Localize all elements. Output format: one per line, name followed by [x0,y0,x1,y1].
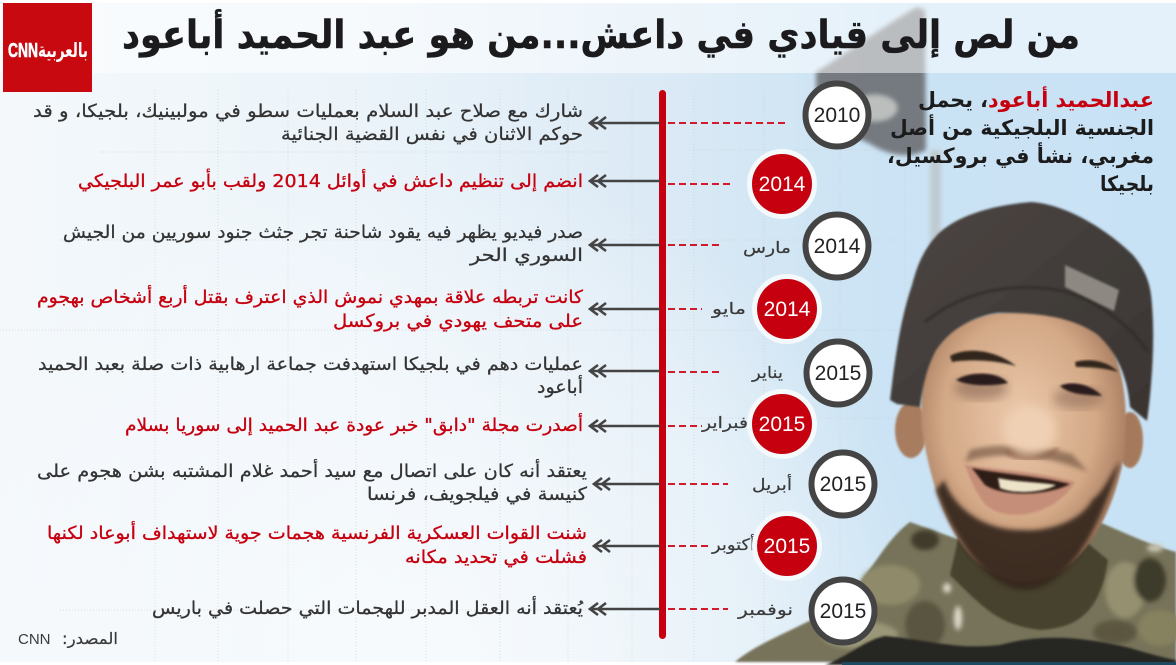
year badge [812,580,874,642]
year badge: 2015 [764,535,810,558]
red dashes [668,183,730,185]
event text: السوري الحر [469,245,583,266]
event text: على متحف يهودي في بروكسل [333,311,583,332]
year badge: 2015 [815,362,861,385]
year badge: 2014 [764,298,811,321]
year badge [754,514,820,578]
year badge [750,152,814,216]
event text: أباعود [537,375,583,398]
red dashes [668,244,723,246]
title: من لص إلى قيادي في داعش...من هو عبد الحميد أباعود [122,9,1080,58]
arrow [590,365,660,377]
event text: يُعتقد أنه العقل المدبر للهجمات التي حصلت في باريس [152,596,584,619]
nose highlight [1004,406,1056,454]
bottom bar [842,662,1176,665]
year badge [812,452,874,516]
event text [37,459,587,505]
event text: كنيسة في فيلجويف، فرنسا [367,484,587,505]
hat label [1065,265,1119,311]
intro text block: بلجيكا [1100,172,1154,196]
face [921,311,1126,582]
source note: CNN [18,631,50,648]
month: مارس [743,238,791,258]
flag in background [816,7,941,265]
row 4: May 2014 [37,276,820,342]
source note: المصدر: [62,629,118,649]
row 3: March 2014 [63,214,868,278]
mouth [965,465,1075,515]
event text [33,101,583,145]
event text [47,521,587,568]
intro text block: عبدالحميد أباعود، يحمل [918,85,1154,112]
logo: CNN Arabic: بالعربية [38,38,88,62]
month: مايو [711,299,746,319]
timeline vertical bar [659,90,666,639]
month: أبريل [752,474,792,495]
row 9: November 2015 [152,580,874,642]
arrow [590,117,660,129]
source note [18,629,118,649]
event text [37,285,583,332]
header band [0,3,1176,73]
intro text block [887,85,1154,196]
month: فبراير [701,413,748,433]
red dashes [668,483,728,485]
intro text block: مغربي، نشأ في بروكسيل، [887,141,1154,168]
event text [38,354,583,398]
event text: أصدرت مجلة "دابق" خبر عودة عبد الحميد إلى سوريا بسلام [125,413,583,436]
event text: صدر فيديو يظهر فيه يقود شاحنة تجر جثث جنود سوريين من الجيش [63,222,583,243]
event text: عمليات دهم في بلجيكا استهدفت جماعة ارهابية ذات صلة بعبد الحميد [38,354,583,375]
red dashes [668,545,708,547]
year badge: 2014 [814,235,861,258]
arrow [590,420,660,432]
year badge [806,342,870,404]
eyes [956,374,1008,385]
logo: CNN Arabic [3,3,92,92]
red dashes [668,425,702,427]
arrow [590,603,660,615]
arrow [594,478,660,490]
logo: CNN Arabic: CNN [8,40,38,62]
row 2: 2014 [78,152,814,216]
year badge: 2015 [820,473,866,496]
year badge: 2015 [820,600,866,623]
red dashes [668,608,728,610]
row 7: April 2015 [37,452,874,516]
eyebrows [950,351,1016,366]
arrow [594,540,660,552]
event text: شارك مع صلاح عبد السلام بعمليات سطو في مولبينيك، بلجيكا، و قد [33,101,583,122]
row 5: January 2015 [38,342,870,404]
jacket [735,522,1176,662]
hat [890,202,1153,421]
beard [936,462,1120,590]
month: نوفمبر [737,600,793,620]
year badge: 2010 [814,104,860,127]
event text: كانت تربطه علاقة بمهدي نموش الذي اعترف بقتل أربع أشخاص بهجوم [37,285,583,308]
year badge [754,276,820,342]
year badge: 2015 [759,413,805,436]
red dashes [668,371,722,373]
row 6: February 2015 [125,392,814,456]
arrow [590,303,660,315]
event text: انضم إلى تنظيم داعش في أوائل 2014 ولقب بأبو عمر البلجيكي [78,168,583,192]
nose shadow [1005,448,1058,459]
intro text block: الجنسية البلجيكية من أصل [890,113,1154,140]
t-shirt [950,520,1108,630]
arrow [590,175,660,187]
camouflage patches [822,530,1176,649]
year badge: 2014 [759,173,806,196]
ears [895,402,927,458]
year badge [806,84,868,146]
red dashes [668,122,788,124]
event text: يعتقد أنه كان على اتصال مع سيد أحمد غلام المشتبه بشن هجوم على [37,459,587,482]
month: أكتوبر [711,534,755,555]
year badge [750,392,814,456]
arrow [590,239,660,251]
event text [63,222,583,266]
hat fold [925,288,1148,352]
month: يناير [751,363,783,383]
red dashes [668,308,702,310]
year badge [806,214,868,278]
portrait photo [735,202,1176,665]
row 8: October 2015 [47,514,820,578]
zipper and collar [825,636,1176,665]
event text: فشلت في تحديد مكانه [405,547,587,568]
row 1: 2010 [33,84,868,146]
event text: شنت القوات العسكرية الفرنسية هجمات جوية لاستهداف أبوعاد لكنها [47,521,587,544]
eye sockets [954,376,1008,400]
event text: حوكم الاثنان في نفس القضية الجنائية [281,124,583,145]
